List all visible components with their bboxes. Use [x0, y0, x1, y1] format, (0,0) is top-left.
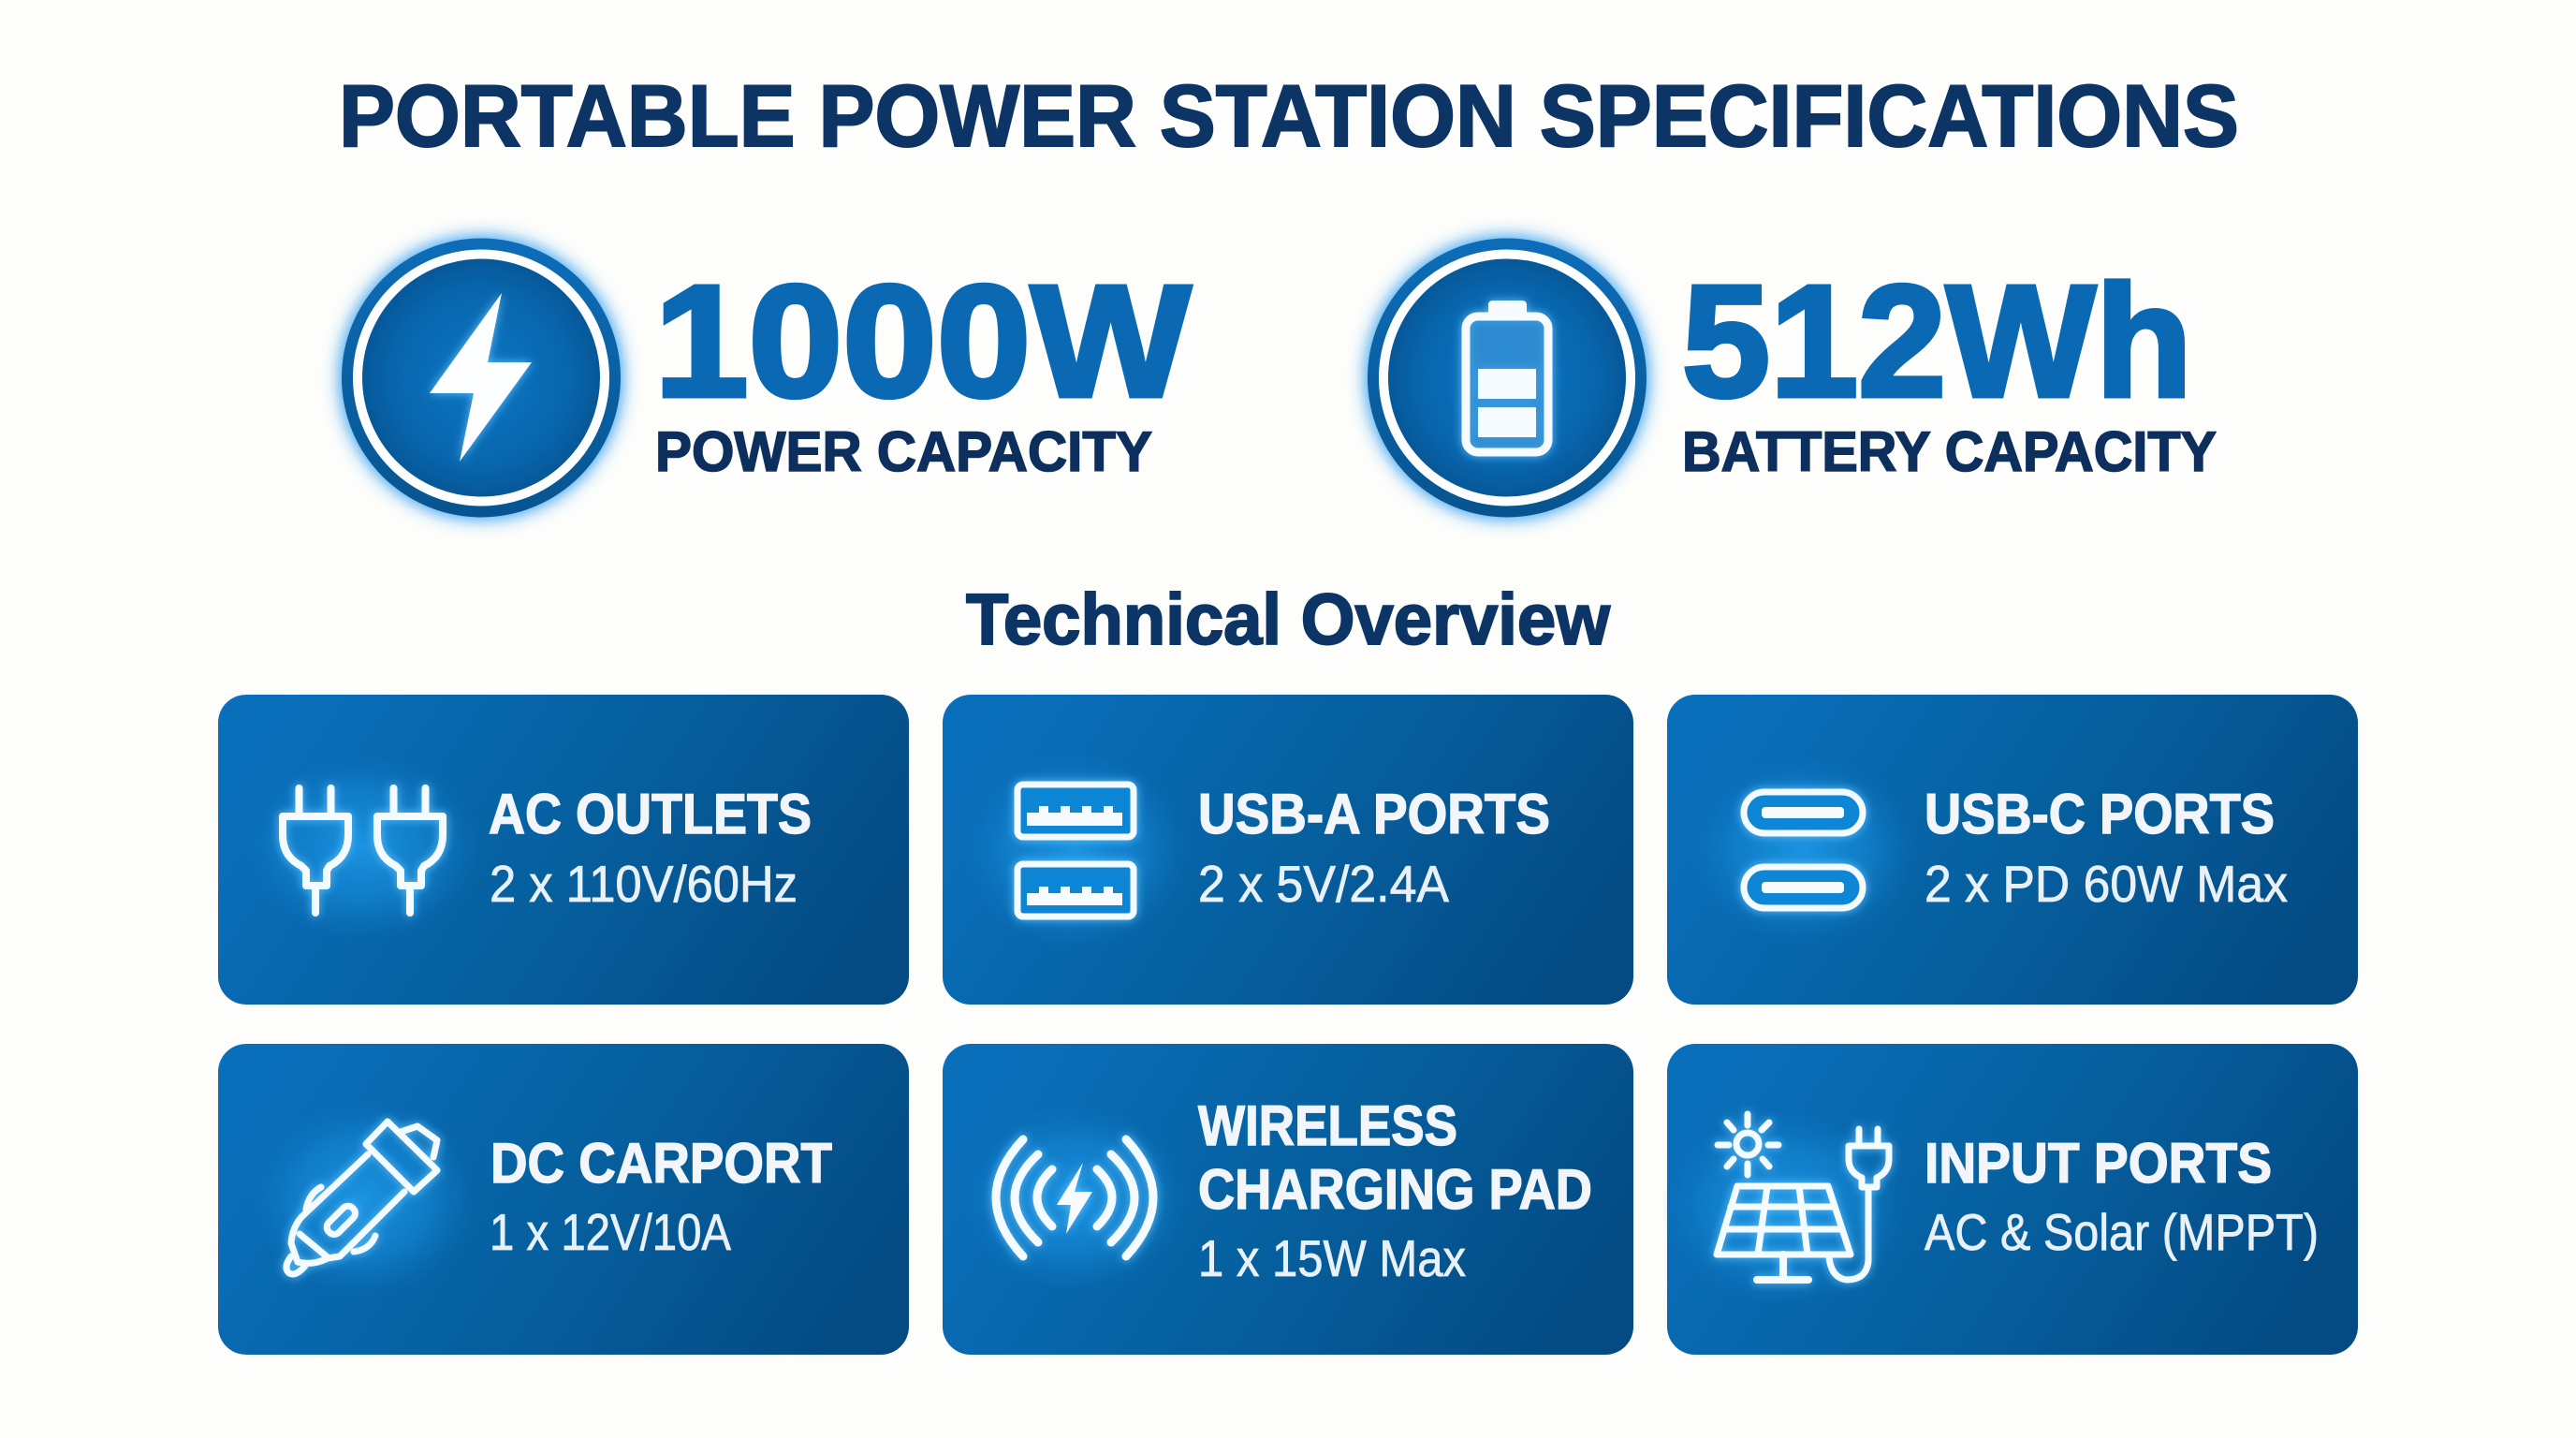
heading: wireless charging pad: CHARGING PAD [1198, 1158, 1592, 1221]
heading: DC carport: DC CARPORT [490, 1132, 832, 1195]
spec: DC carport: 1 x 12V/10A [490, 1203, 731, 1261]
value: 512Wh: 512Wh [1682, 253, 2192, 431]
icon: sun, solar panel and plug [1717, 1114, 1889, 1280]
panel: USB-C ports [1667, 695, 2358, 1005]
heading: wireless charging pad [1198, 1094, 1592, 1221]
label: battery capacity: BATTERY CAPACITY [1682, 420, 2217, 483]
stat: power capacity [340, 236, 1192, 519]
icon: wireless charging waves [996, 1139, 1153, 1256]
heading: wireless charging pad: WIRELESS [1198, 1094, 1457, 1157]
icon: two USB-C ports [1744, 792, 1863, 908]
stat: battery capacity [1366, 236, 2217, 519]
spec: AC outlets: 2 x 110V/60Hz [490, 855, 798, 913]
label: power capacity: POWER CAPACITY [655, 420, 1152, 483]
icon: two AC plugs [283, 788, 443, 913]
heading: USB-C ports: USB-C PORTS [1925, 783, 2275, 845]
heading: input ports: INPUT PORTS [1925, 1132, 2272, 1195]
spec: USB-A ports: 2 x 5V/2.4A [1198, 855, 1449, 913]
icon: two USB-A ports [1017, 785, 1134, 917]
heading: AC outlets: AC OUTLETS [489, 783, 812, 845]
panel: AC outlets [218, 695, 909, 1005]
panel: USB-A ports [943, 695, 1633, 1005]
spec: USB-C ports: 2 x PD 60W Max [1925, 855, 2288, 913]
icon: battery badge [1366, 236, 1648, 519]
spec: input ports: AC & Solar (MPPT) [1925, 1203, 2319, 1261]
value: 1000W: 1000W [654, 253, 1192, 431]
icon: car charger plug [286, 1122, 437, 1274]
panel: input ports [1661, 1044, 2358, 1355]
panel: wireless charging pad [943, 1044, 1633, 1355]
spec: wireless charging pad: 1 x 15W Max [1198, 1229, 1466, 1287]
title: PORTABLE POWER STATION SPECIFICATIONS [339, 66, 2239, 165]
panel: DC carport [218, 1044, 909, 1355]
section heading: Technical Overview [966, 580, 1611, 660]
heading: USB-A ports: USB-A PORTS [1198, 783, 1550, 845]
icon: lightning bolt badge [340, 236, 622, 519]
